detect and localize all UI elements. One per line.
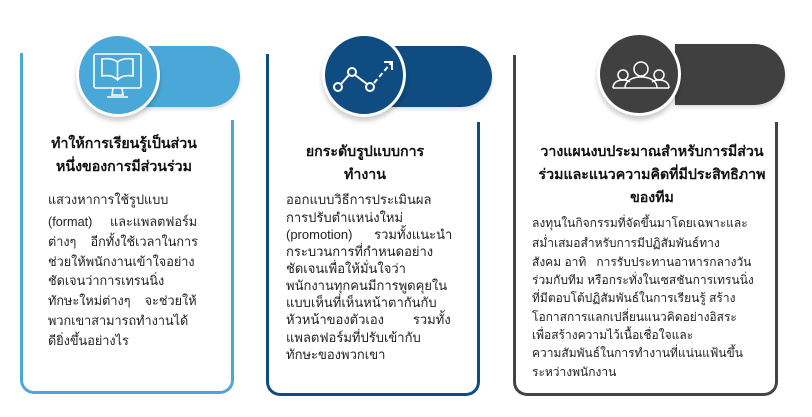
icon: monitor with open book — [76, 33, 160, 117]
header pill — [675, 44, 785, 105]
body text: ดียิ่งขึ้นอย่างไร — [48, 334, 129, 348]
body text: หัวหน้าของตัวเอง รวมทั้ง — [286, 312, 451, 327]
body text: พนักงานทุกคนมีการพูดคุยใน — [286, 278, 447, 293]
body text: การปรับตำแหน่งใหม่ — [286, 210, 403, 225]
card outline — [266, 54, 480, 396]
body text: ร่วมกับทีม หรือกระทั่งในเซสชันการเทรนนิ่ง — [532, 273, 754, 287]
body text: กระบวนการที่กำหนดอย่าง — [286, 244, 433, 259]
heading: วางแผนงบประมาณสำหรับการมีส่วน ร่วมและแนวความคิดที่มีประสิทธิภาพ ของทีม — [538, 144, 765, 206]
body text: แสวงหาการใช้รูปแบบ — [48, 193, 168, 207]
body text: ชัดเจนเพื่อให้มั่นใจว่า — [286, 261, 406, 276]
body text: แบบเห็นที่เห็นหน้าตากันกับ — [286, 295, 437, 310]
body text: โอกาสการแลกเปลี่ยนแนวคิดอย่างอิสระ — [532, 310, 737, 324]
icon: rising line chart — [322, 33, 406, 117]
card outline — [513, 55, 778, 396]
body text: (promotion) รวมทั้งแนะนำ — [286, 227, 452, 242]
body text: พวกเขาสามารถทำงานได้ — [48, 314, 188, 328]
body text: ความสัมพันธ์ในการทำงานที่แน่นแฟ้นขึ้น — [532, 346, 743, 360]
panel: budget — [513, 35, 786, 396]
header pill — [385, 46, 492, 107]
body text: ระหว่างพนักงาน — [532, 365, 616, 379]
header pill — [140, 46, 240, 107]
body text: ต่างๆ อีกทั้งใช้เวลาในการ — [48, 235, 198, 249]
body text: ชัดเจนว่าการเทรนนิ่ง — [48, 274, 164, 288]
body text: ลงทุนในกิจกรรมที่จัดขึ้นมาโดยเฉพาะและ — [532, 216, 748, 230]
body text — [48, 192, 198, 348]
body text: สังคม อาทิ การรับประทานอาหารกลางวัน — [532, 255, 751, 269]
panel: work format — [266, 36, 494, 396]
body text: ทักษะใหม่ต่างๆ จะช่วยให้ — [48, 294, 197, 308]
body text: (format) และแพลตฟอร์ม — [48, 215, 197, 229]
body text: ทักษะของพวกเขา — [286, 347, 385, 362]
body text: แพลตฟอร์มที่ปรับเข้ากับ — [286, 330, 421, 345]
body text — [532, 214, 754, 379]
heading: ทำให้การเรียนรู้เป็นส่วน หนึ่งของการมีส่วนร่วม — [51, 136, 197, 175]
body text — [286, 192, 452, 362]
body text: ออกแบบวิธีการประเมินผล — [286, 192, 431, 207]
icon: group of people — [597, 32, 681, 116]
body text: เพื่อสร้างความไว้เนื้อเชื่อใจและ — [532, 328, 693, 342]
panel: learning — [20, 36, 242, 394]
body text: ที่มีตอบโต้ปฏิสัมพันธ์ในการเรียนรู้ สร้าง — [532, 291, 735, 305]
body text: สม่ำเสมอสำหรับการมีปฏิสัมพันธ์ทาง — [532, 236, 720, 250]
heading: ยกระดับรูปแบบการ ทำงาน — [306, 144, 424, 183]
card outline — [20, 53, 234, 394]
body text: ช่วยให้พนักงานเข้าใจอย่าง — [48, 255, 195, 269]
